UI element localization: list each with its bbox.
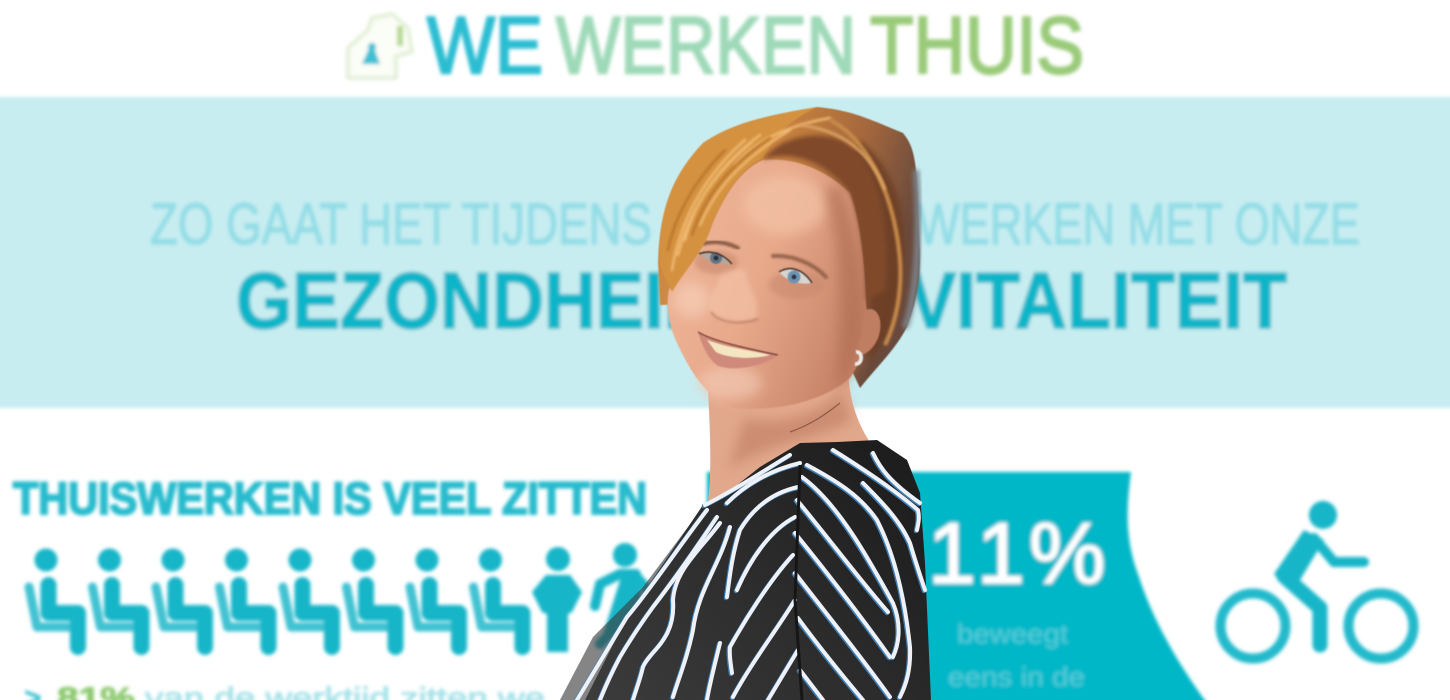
panel: 11 percent moves	[707, 472, 1212, 700]
icon: sitting person 8	[474, 548, 522, 647]
heading: thuiswerken is veel zitten: THUISWERKEN IS VEEL ZITTEN	[13, 473, 647, 524]
icon: sitting person 2	[92, 548, 142, 647]
icon: sitting person 1	[29, 548, 78, 647]
eyebrow right	[773, 256, 826, 277]
mouth	[698, 332, 778, 368]
caption line 2: eens in de	[948, 662, 1085, 692]
banner line 1 left: ZO GAAT HET TIJDENS	[150, 192, 652, 257]
banner line 2 left: GEZONDHEID	[236, 256, 716, 345]
dark hair above forehead	[763, 136, 886, 300]
icon: house with person	[348, 14, 412, 78]
photo: smiling woman in striped blouse	[560, 107, 931, 700]
ear	[856, 309, 880, 356]
number: 11%: %	[1029, 506, 1105, 602]
eye socket shadow	[694, 250, 738, 274]
sheer sleeve edge	[560, 507, 717, 700]
face	[668, 160, 880, 409]
hair right shadow	[845, 140, 905, 360]
icon: sitting person 7	[410, 548, 459, 647]
icon: sitting person 6	[346, 548, 396, 647]
logo word: WERKEN: WERKEN	[556, 1, 856, 91]
eye left	[699, 252, 732, 264]
icon: walking person	[595, 543, 650, 650]
nose bridge highlight	[710, 268, 758, 321]
head	[658, 107, 920, 409]
number: 11%: 1	[977, 506, 1025, 602]
neck	[708, 370, 875, 520]
cheek highlight	[674, 282, 710, 318]
icon: cyclist	[1220, 501, 1414, 658]
forehead highlight	[743, 175, 827, 235]
hair back	[658, 107, 920, 388]
icon: sitting person 4	[220, 548, 268, 647]
pictogram row: sitting and standing people	[29, 543, 650, 652]
number: 11%: 1	[928, 506, 976, 602]
earring	[855, 352, 861, 364]
blouse stripes	[576, 451, 924, 700]
logo	[348, 1, 1084, 91]
hair fringe	[660, 107, 918, 345]
icon: sitting person 3	[156, 548, 205, 647]
eyebrow left	[702, 242, 738, 248]
logo word: THUIS: THUIS	[870, 1, 1084, 91]
right face shadow	[825, 185, 866, 392]
title banner	[0, 97, 1450, 408]
icon: sitting person 5	[283, 548, 332, 647]
logo word: WE: WE	[427, 1, 543, 91]
chin highlight	[698, 366, 762, 400]
banner line 2 right: VITALITEIT	[908, 256, 1287, 345]
blouse	[560, 440, 931, 700]
eye right	[779, 269, 812, 284]
blouse centre seam	[795, 465, 802, 700]
caption line 1: beweegt	[957, 619, 1069, 649]
icon: standing person	[532, 547, 582, 652]
nose line	[711, 312, 758, 323]
